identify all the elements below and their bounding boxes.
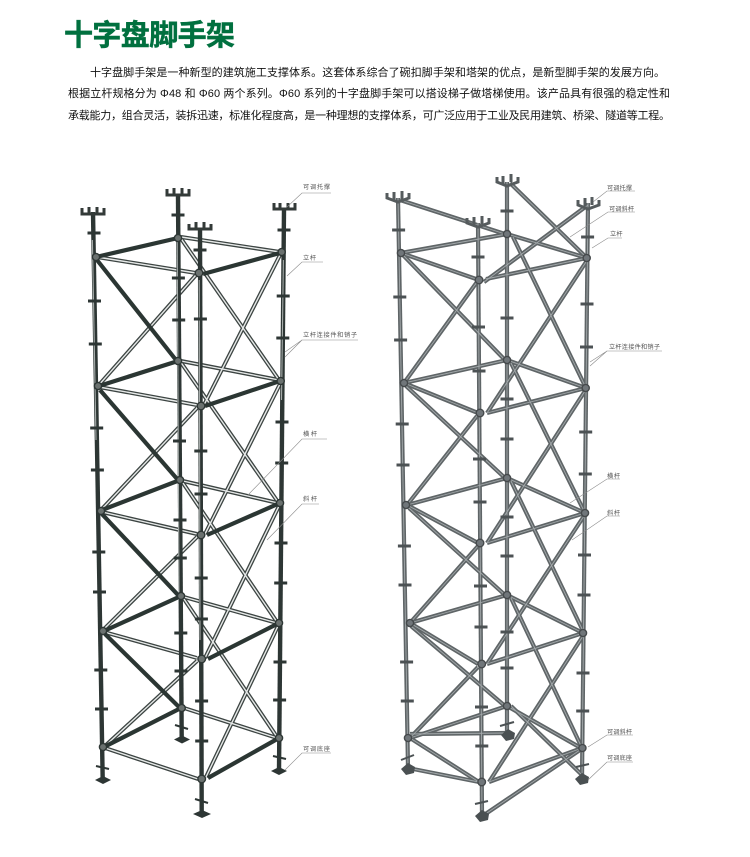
intro text block bbox=[68, 65, 670, 122]
pole highlights bbox=[92, 240, 283, 640]
intro text block: 十字盘脚手架是一种新型的建筑施工支撑体系。这套体系综合了碗扣脚手架和塔架的优点，是新型脚手架的发展方向。 bbox=[90, 65, 665, 79]
callout: adjustable top support: 可调托撑 bbox=[607, 184, 632, 192]
top fork supports bbox=[387, 174, 599, 227]
callout: pole connector and pin: 立杆连接件和销子 bbox=[303, 331, 357, 339]
callout: diagonal brace: 斜杆 bbox=[303, 495, 317, 503]
callout: adjustable base bbox=[285, 745, 331, 770]
callout: adjustable diagonal lower: 可调斜杆 bbox=[607, 728, 632, 736]
callout: adjustable diagonal: 可调斜杆 bbox=[609, 205, 634, 213]
collars on poles bbox=[394, 211, 593, 746]
callout: ledger bbox=[248, 430, 327, 495]
left scaffold tower bbox=[82, 188, 295, 818]
callout: pole connector and pin bbox=[285, 331, 358, 357]
callout: adjustable base: 可调底座 bbox=[607, 754, 632, 762]
pins above base plates bbox=[96, 725, 286, 803]
callout: ledger bbox=[570, 472, 620, 503]
joints bbox=[92, 234, 285, 783]
joints bbox=[397, 230, 590, 786]
top fork supports bbox=[82, 188, 295, 229]
callout: adjustable top support bbox=[287, 183, 331, 207]
tube members and poles bbox=[398, 182, 588, 815]
light double-tube members bbox=[97, 237, 280, 779]
intro text block: 承载能力，组合灵活，装拆迅速，标准化程度高，是一种理想的支撑体系，可广泛应用于工业及民用建筑、桥梁、隧道等工程。 bbox=[68, 108, 670, 122]
callout: pole: 立杆 bbox=[303, 254, 316, 262]
callouts: left tower bbox=[248, 183, 358, 770]
callout: adjustable top support bbox=[593, 184, 635, 202]
callout: diagonal brace bbox=[572, 509, 620, 540]
callout: adjustable diagonal lower bbox=[588, 728, 633, 747]
callout: pole bbox=[287, 254, 323, 276]
callouts: right tower bbox=[570, 184, 662, 780]
base plates bbox=[95, 736, 287, 818]
callout: adjustable diagonal bbox=[570, 205, 635, 237]
callout: pole connector and pin: 立杆连接件和销子 bbox=[609, 343, 660, 351]
callout: pole bbox=[592, 230, 622, 248]
callout: ledger: 横杆 bbox=[607, 472, 620, 480]
callout: pole: 立杆 bbox=[610, 230, 622, 238]
callout: diagonal brace bbox=[267, 495, 319, 540]
right scaffold tower bbox=[387, 174, 599, 822]
callout: adjustable base: 可调底座 bbox=[303, 745, 330, 753]
callout: adjustable base bbox=[588, 754, 633, 780]
pins above base plates bbox=[401, 722, 589, 804]
base plates bbox=[401, 729, 589, 822]
callout: pole connector and pin bbox=[590, 343, 662, 366]
intro text block: 根据立杆规格分为 Φ48 和 Φ60 两个系列。Φ60 系列的十字盘脚手架可以搭设梯子做塔梯使用。该产品具有很强的稳定性和 bbox=[68, 86, 670, 100]
callout: diagonal brace: 斜杆 bbox=[607, 509, 620, 517]
collars on poles bbox=[89, 215, 289, 741]
title: 十字盘脚手架 bbox=[64, 19, 235, 52]
vertical poles bbox=[93, 195, 284, 814]
callout: ledger: 横杆 bbox=[303, 430, 317, 438]
callout: adjustable top support: 可调托撑 bbox=[303, 183, 330, 191]
dark horizontal and diagonal members bbox=[96, 238, 280, 778]
